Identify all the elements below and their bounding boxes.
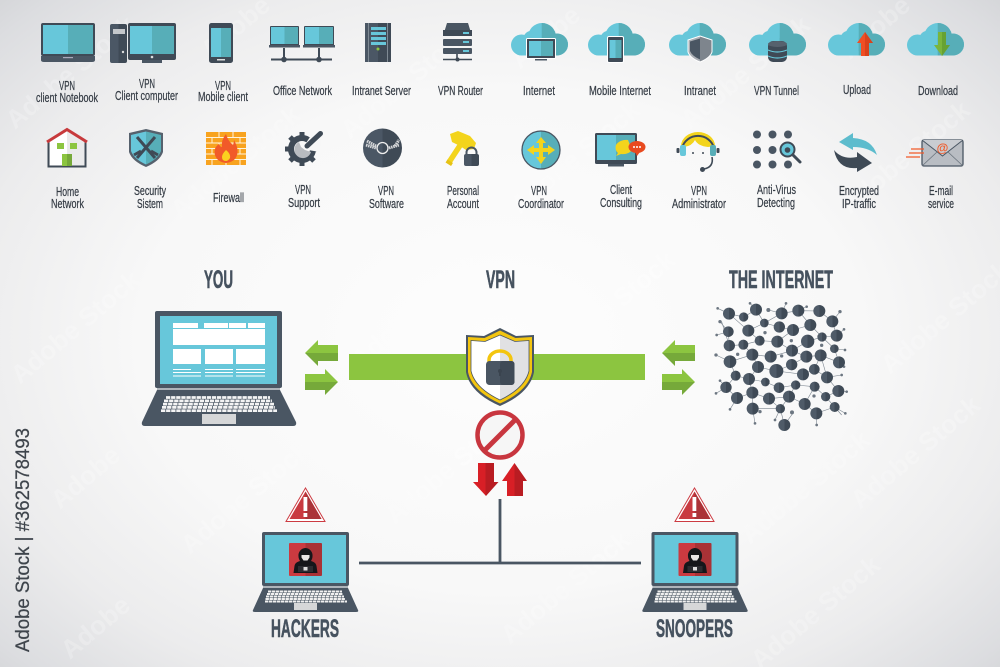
icon: VPN router: [438, 23, 483, 98]
icon: upload cloud: Upload: [843, 83, 871, 97]
icon: e-mail service: [906, 140, 963, 211]
icon: upload cloud: [828, 23, 885, 97]
icon: home network: Network: [51, 197, 85, 211]
icon: intranet cloud: Intranet: [684, 84, 716, 98]
icon: VPN router: VPN Router: [438, 84, 483, 98]
connector lines to hackers and snoopers: [359, 499, 641, 563]
icon: personal account key and lock: Personal: [447, 184, 479, 198]
icon: VPN coordinator: Coordinator: [518, 197, 564, 211]
watermark pattern: Adobe Stock: [845, 389, 986, 515]
icon: warning triangle, hackers: [286, 488, 325, 522]
panel: icon legend row 2: [47, 128, 963, 211]
icon: client consulting: Client: [610, 183, 632, 197]
icon: intranet cloud: [669, 23, 726, 98]
icon: internet cloud: Internet: [523, 84, 555, 98]
watermark pattern: Adobe Stock: [0, 9, 141, 135]
watermark pattern: Adobe Stock: [505, 94, 646, 220]
arrow: traffic left, from internet to VPN: [662, 340, 695, 366]
icon: no entry sign: [478, 412, 522, 458]
icon: VPN client notebook: VPN: [59, 79, 75, 93]
icon: VPN administrator headset: Administrator: [672, 197, 726, 211]
laptop: you: [142, 311, 296, 426]
icon: VPN administrator headset: VPN: [691, 184, 707, 198]
watermark pattern: Adobe Stock: [380, 404, 521, 530]
watermark pattern: Adobe Stock: [165, 99, 306, 225]
icon: internet cloud: [511, 23, 568, 98]
watermark pattern: Adobe Stock: [175, 434, 316, 560]
icon: encrypted IP traffic: IP-traffic: [842, 197, 876, 211]
icon: firewall: Firewall: [213, 191, 244, 205]
icon: office network: [269, 26, 335, 98]
watermark pattern: Adobe: [45, 440, 126, 515]
icon: VPN client computer: [110, 23, 178, 103]
icon: e-mail service: service: [928, 197, 954, 211]
icon: VPN software disc: Software: [369, 197, 404, 211]
icon: encrypted IP traffic: Encrypted: [839, 184, 879, 198]
watermark pattern: Adobe Stock: [495, 524, 636, 650]
heading: HACKERS: HACKERS: [271, 615, 339, 643]
watermark pattern: Adobe Stock: [335, 19, 476, 145]
arrow: red down: [473, 463, 498, 496]
icon: security system shield: Security: [134, 184, 167, 198]
stock image credit: Adobe Stock | #362578493: [13, 428, 34, 652]
icon: personal account key and lock: [446, 131, 479, 211]
watermark pattern: Adobe Stock: [675, 9, 816, 135]
watermark pattern: Adobe Stock: [345, 249, 486, 375]
icon: VPN tunnel cloud: VPN Tunnel: [754, 84, 799, 98]
icon: VPN client notebook: [36, 23, 99, 105]
icon: download cloud: Download: [918, 84, 958, 98]
watermark pattern: Adobe Stock: [735, 424, 876, 550]
arrow: traffic right, from you to VPN: [305, 369, 338, 395]
arrow: traffic left, from VPN to you: [305, 340, 338, 366]
heading: THE INTERNET: THE INTERNET: [729, 266, 833, 294]
watermark pattern: Adobe: [55, 590, 136, 665]
icon: VPN coordinator: VPN: [531, 184, 547, 198]
icon: personal account key and lock: Account: [447, 197, 479, 211]
laptop: hackers: [253, 532, 358, 612]
icon: security system shield: Sistem: [137, 197, 163, 211]
icon: VPN client computer: VPN: [139, 77, 155, 91]
icon: intranet server: [352, 23, 411, 98]
icon: VPN support gear and wrench: [285, 132, 322, 210]
heading: SNOOPERS: SNOOPERS: [656, 615, 733, 643]
watermark pattern: Adobe Stock: [5, 264, 146, 390]
icon: VPN shield with padlock: [466, 328, 534, 406]
icon: VPN mobile client: Mobile client: [198, 90, 248, 104]
icon: VPN coordinator: [518, 131, 564, 211]
icon: anti-virus detecting: [753, 130, 800, 210]
watermark pattern: Adobe Stock: [540, 244, 681, 370]
icon: office network: Office Network: [273, 84, 333, 98]
icon: VPN mobile client: [198, 23, 248, 104]
heading: YOU: YOU: [204, 266, 233, 294]
icon: client consulting: Consulting: [600, 196, 642, 210]
icon: warning triangle, snoopers: [675, 488, 714, 522]
icon: anti-virus detecting: Anti-Virus: [757, 183, 796, 197]
arrow: red up: [502, 463, 527, 496]
icon: VPN support gear and wrench: Support: [288, 196, 320, 210]
icon: e-mail service: @: [937, 141, 948, 155]
icon: VPN client computer: Client computer: [115, 89, 178, 103]
icon: VPN software disc: [363, 128, 404, 211]
icon: e-mail service: E-mail: [929, 184, 953, 198]
icon: VPN client notebook: client Notebook: [36, 91, 99, 105]
watermark pattern: Adobe: [505, 0, 586, 75]
panel: icon legend row 1: [36, 23, 964, 105]
icon: VPN software disc: VPN: [378, 184, 394, 198]
icon: home network: Home: [56, 185, 79, 199]
icon: intranet server: Intranet Server: [352, 84, 411, 98]
icon: mobile internet cloud: [588, 23, 651, 98]
arrow: traffic right, from VPN to internet: [662, 369, 695, 395]
icon: mobile internet cloud: Mobile Internet: [589, 84, 651, 98]
icon: VPN support gear and wrench: VPN: [295, 183, 311, 197]
icon: VPN mobile client: VPN: [215, 79, 231, 93]
icon: security system shield: [129, 129, 167, 211]
chart: internet node network: [714, 302, 848, 431]
icon: anti-virus detecting: Detecting: [757, 196, 795, 210]
laptop: snoopers: [642, 532, 748, 612]
icon: encrypted IP traffic: [834, 133, 879, 211]
tunnel bar: [349, 354, 645, 380]
icon: download cloud: [907, 23, 964, 98]
icon: firewall: [206, 132, 246, 205]
icon: home network: [47, 130, 87, 211]
icon: client consulting: [595, 133, 646, 210]
heading: VPN: VPN: [486, 266, 515, 294]
icon: VPN tunnel cloud: [749, 23, 806, 98]
watermark pattern: Adobe Stock: [835, 94, 976, 220]
icon: VPN administrator headset: [672, 132, 726, 211]
